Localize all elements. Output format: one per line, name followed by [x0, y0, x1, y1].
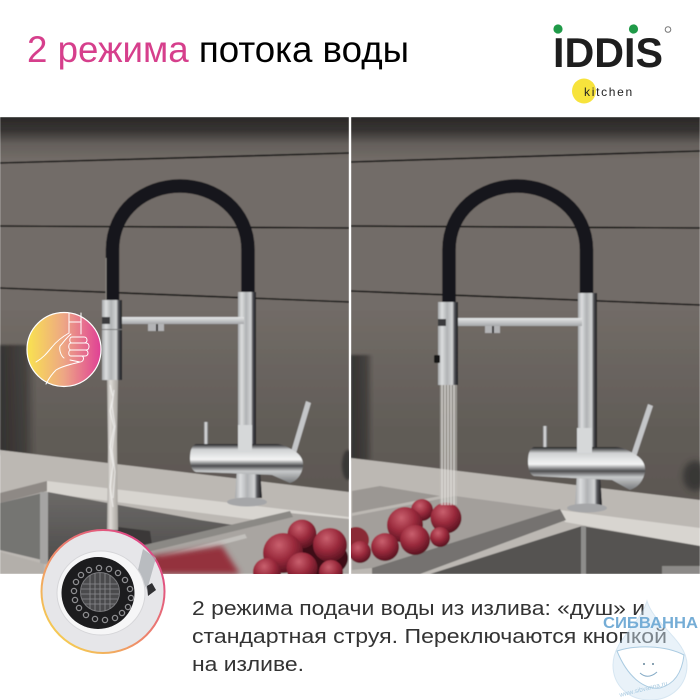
fruit tray left	[144, 510, 349, 574]
logo: IDDIS kitchen	[553, 24, 671, 103]
fruit tray right	[343, 499, 462, 563]
icon: aerator close-up	[42, 530, 164, 653]
description text: на изливе.	[192, 653, 304, 676]
logo: IDDIS kitchen: kitchen	[584, 85, 634, 99]
description text	[192, 597, 667, 676]
watermark: Sibvanna drop with bathtub: www.sibvanna.ru	[618, 680, 669, 699]
icon: hand pressing button	[27, 312, 101, 386]
right photo panel: faucet with shower stream	[343, 117, 700, 574]
left photo panel: faucet with straight stream	[0, 117, 354, 586]
counter right	[351, 458, 700, 574]
water spray right	[440, 385, 457, 505]
watermark: Sibvanna drop with bathtub: СИБВАННА	[603, 615, 698, 632]
title: 2 режима потока воды	[27, 29, 409, 70]
sink right	[352, 486, 700, 574]
sink left	[0, 480, 232, 574]
description text: стандартная струя. Переключаются кнопкой	[192, 625, 667, 648]
water stream left	[107, 380, 118, 530]
counter left	[0, 450, 349, 574]
faucet left	[102, 186, 311, 506]
description text: 2 режима подачи воды из излива: «душ» и	[192, 597, 645, 620]
logo: IDDIS kitchen: IDDIS	[553, 29, 663, 76]
watermark: Sibvanna drop with bathtub	[603, 601, 698, 700]
faucet right	[434, 186, 653, 512]
